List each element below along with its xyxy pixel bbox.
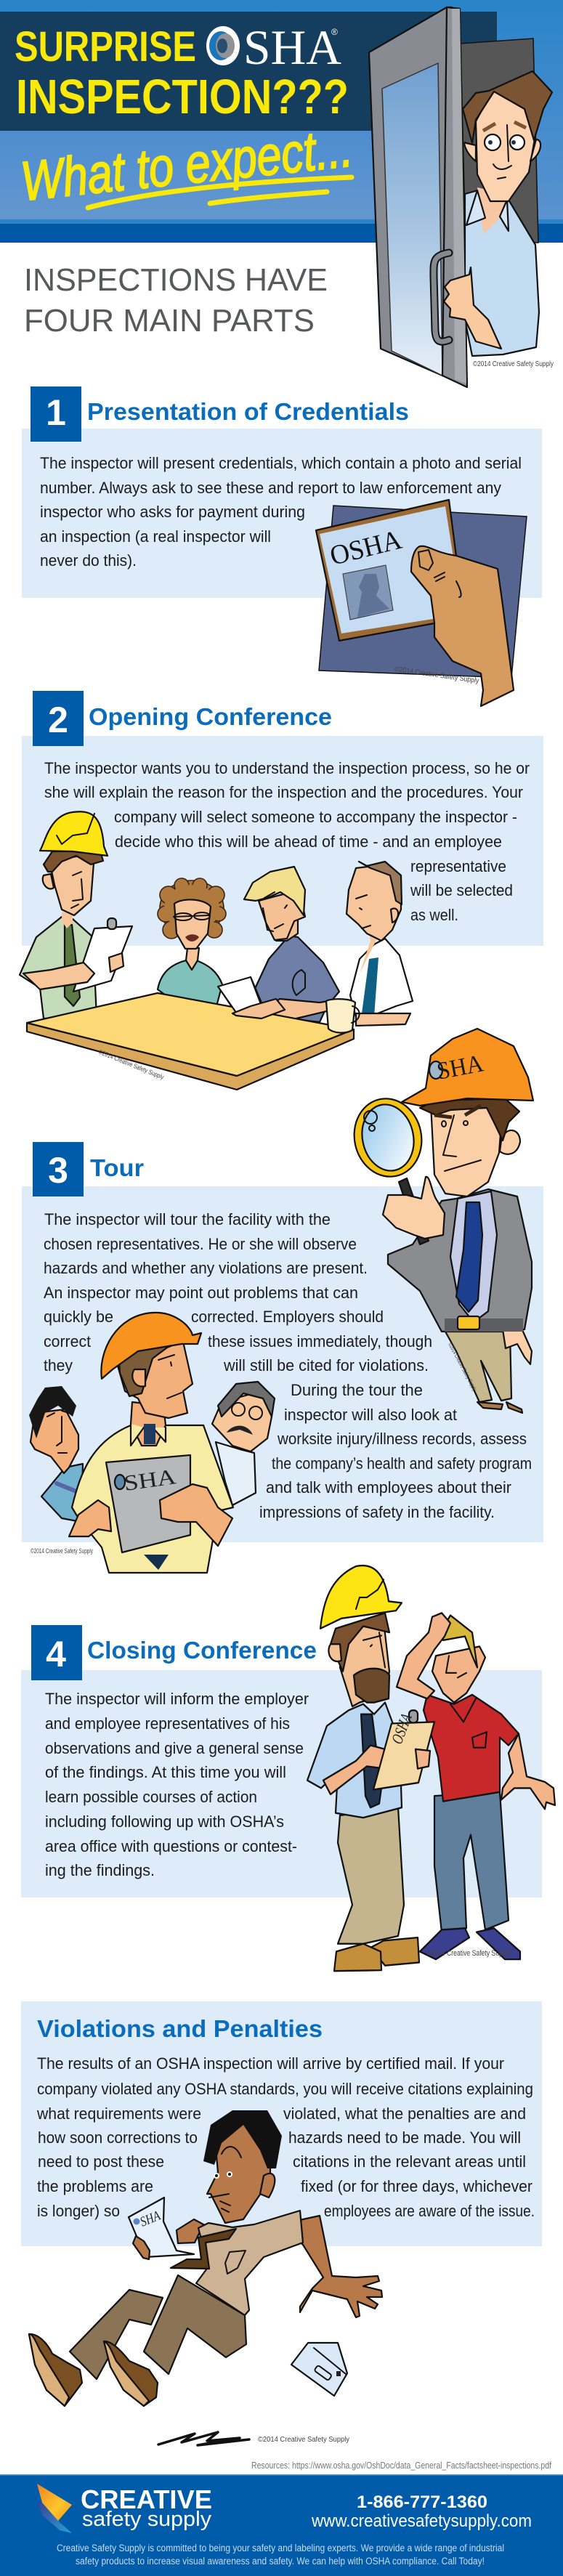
body text: The results of an OSHA inspection will arrive by certified mail. If your — [37, 2054, 504, 2073]
contact details: 1-866-777-1360 — [357, 2492, 487, 2512]
number badge 4: 4 — [46, 1634, 66, 1674]
woman with curly hair — [158, 878, 226, 1006]
body text — [36, 2054, 535, 2220]
body text: During the tour the — [291, 1381, 423, 1399]
clipboard — [106, 1455, 190, 1552]
illustration: inspector with magnifier — [347, 1029, 533, 1413]
table — [27, 977, 354, 1090]
illustration: hand with credentials: ©2014 Creative Safety Supply — [394, 665, 479, 685]
body text: she will explain the reason for the inspection and the procedures. Your — [44, 783, 523, 801]
body text: inspector will also look at — [284, 1406, 457, 1424]
body text: The inspector will present credentials, which contain a photo and serial — [40, 454, 522, 472]
body text: never do this). — [40, 551, 137, 570]
door handle — [434, 253, 449, 341]
illustration: man behind door — [369, 7, 554, 387]
logo: OSHA: SHA — [243, 20, 341, 75]
hand on door — [444, 267, 501, 349]
body text: learn possible courses of action — [45, 1788, 257, 1806]
body text: and employee representatives of his — [45, 1714, 290, 1733]
body text: chosen representatives. He or she will observe — [44, 1235, 357, 1253]
envelope — [291, 2343, 347, 2396]
orange OSHA hard hat — [402, 1029, 533, 1106]
number badge 4 — [31, 1625, 82, 1680]
body text: decide who this will be ahead of time - and an employee — [115, 833, 502, 851]
footer — [0, 2474, 563, 2576]
body text: area office with questions or contest- — [45, 1837, 297, 1855]
company blurb — [57, 2543, 504, 2567]
copyright: ©2014 Creative Safety Supply — [97, 1048, 165, 1081]
body text: of the findings. At this time you will — [45, 1763, 286, 1781]
body text: an inspection (a real inspector will — [40, 527, 271, 546]
trousers and shoes — [29, 2275, 246, 2406]
magnifying glass — [347, 1093, 429, 1244]
panel: 2 opening conference — [20, 691, 543, 1090]
body text: company violated any OSHA standards, you will receive citations explaining — [37, 2080, 533, 2098]
body text: company will select someone to accompany the inspector - — [114, 808, 517, 826]
body text: The inspector will inform the employer — [45, 1690, 309, 1708]
man with beard — [307, 1566, 434, 1971]
heading: four main parts — [24, 262, 328, 339]
heading: closing conference: Closing Conference — [87, 1637, 317, 1664]
panel: violations and penalties — [21, 2001, 542, 2406]
body text — [45, 1690, 309, 1879]
body text: quickly be — [44, 1308, 113, 1326]
worker right with glasses — [212, 1382, 275, 1505]
number badge 3: 3 — [48, 1150, 68, 1191]
company blurb: safety products to increase visual awareness and safety. We can help with OSHA compliance. Call Today! — [76, 2556, 485, 2567]
number badge 1 — [31, 386, 81, 442]
logo icon — [37, 2484, 72, 2533]
worker left — [29, 1386, 103, 1522]
body text: corrected. Employers should — [191, 1308, 384, 1326]
body text: fixed (or for three days, whichever — [301, 2177, 532, 2195]
number badge 3 — [33, 1142, 84, 1196]
body text: hazards need to be made. You will — [288, 2129, 521, 2147]
body text — [44, 1210, 532, 1521]
contact details: www.creativesafetysupply.com — [311, 2511, 532, 2531]
body text: and talk with employees about their — [266, 1478, 511, 1496]
heading: opening conference: Opening Conference — [89, 703, 332, 730]
company name: safety supply — [82, 2508, 212, 2531]
body text: representative — [410, 857, 506, 875]
body text: The inspector wants you to understand the inspection process, so he or — [44, 759, 530, 777]
panel: 4 closing conference — [21, 1566, 555, 1971]
number badge 1: 1 — [46, 392, 66, 433]
subtitle: what to expect: What to expect... — [18, 116, 355, 213]
body text: including following up with OSHA’s — [45, 1812, 284, 1831]
copyright: ©2014 Creative Safety Supply — [426, 1950, 511, 1958]
face — [476, 91, 536, 201]
letter — [129, 2198, 194, 2259]
man with beard: OSHA — [388, 1711, 415, 1746]
header banner — [0, 0, 563, 243]
body text: need to post these — [38, 2152, 164, 2171]
company name: CREATIVE — [81, 2484, 212, 2514]
illustration: inspector with magnifier: ©2014 Creative Safety Supply — [447, 1342, 478, 1392]
body text: impressions of safety in the facility. — [259, 1503, 495, 1521]
body text: The inspector will tour the facility with the — [44, 1210, 331, 1228]
body text: number. Always ask to see these and report to law enforcement any — [40, 479, 501, 497]
number badge 2: 2 — [48, 700, 68, 740]
body text: inspector who asks for payment during — [40, 503, 305, 521]
illustration: inspector with clipboard and two workers: ©2014 Creative Safety Supply — [31, 1547, 93, 1555]
coffee mug — [326, 999, 360, 1033]
shirt and arm — [171, 2211, 382, 2317]
body text — [44, 759, 530, 924]
body text: as well. — [410, 906, 458, 924]
title: inspection: INSPECTION??? — [16, 70, 349, 124]
heading: tour: Tour — [90, 1154, 144, 1181]
body text: observations and give a general sense — [45, 1739, 304, 1757]
body text: An inspector may point out problems that can — [44, 1284, 358, 1302]
body text: correct — [44, 1332, 91, 1350]
body text: hazards and whether any violations are present. — [44, 1259, 368, 1277]
head — [203, 2110, 282, 2223]
main figure — [69, 1313, 233, 1573]
company name — [81, 2484, 212, 2531]
body text: worksite injury/illness records, assess — [277, 1430, 527, 1448]
panel: 3 tour — [22, 1029, 543, 1573]
signature and copyright — [158, 2432, 349, 2445]
body text: violated, what the penalties are and — [283, 2105, 526, 2123]
company blurb: Creative Safety Supply is committed to being your safety and labeling experts. We provide a wide range of industrial — [57, 2543, 504, 2553]
signature and copyright: ©2014 Creative Safety Supply — [258, 2436, 349, 2444]
body text: will still be cited for violations. — [223, 1356, 429, 1374]
blond man in blue shirt — [219, 867, 339, 1022]
letter: SHA — [138, 2208, 163, 2230]
man with tie and mug — [347, 862, 413, 1026]
logo: OSHA: ® — [331, 27, 338, 37]
illustration: conference group — [20, 811, 413, 1090]
number badge 2 — [33, 691, 84, 746]
body text: these issues immediately, though — [208, 1332, 432, 1350]
heading: four main parts: FOUR MAIN PARTS — [24, 303, 315, 339]
illustration: inspector with clipboard and two workers — [29, 1313, 275, 1573]
body text: will be selected — [410, 881, 513, 899]
illustration: two men closing conference — [307, 1566, 555, 1971]
person with yellow hard hat — [20, 811, 132, 1018]
body text: the company’s health and safety program — [272, 1454, 532, 1473]
body text: what requirements were — [36, 2105, 201, 2123]
clipboard: SHA — [122, 1465, 178, 1496]
illustration: falling man reading letter — [29, 2110, 382, 2406]
illustration: hand with credentials — [316, 500, 527, 706]
man in red shirt — [397, 1613, 555, 1959]
contact details — [311, 2492, 532, 2531]
body text: citations in the relevant areas until — [293, 2152, 526, 2171]
body text — [40, 454, 522, 570]
body text: is longer) so — [37, 2202, 120, 2220]
door — [369, 7, 452, 376]
body text: the problems are — [37, 2177, 153, 2195]
heading: presentation: Presentation of Credentials — [87, 398, 409, 425]
heading: four main parts: INSPECTIONS HAVE — [24, 262, 328, 298]
orange OSHA hard hat: SHA — [434, 1050, 486, 1085]
panel: 1 presentation of credentials — [22, 386, 542, 706]
title: surprise: SURPRISE — [15, 23, 196, 70]
heading: violations: Violations and Penalties — [37, 2015, 323, 2042]
body text: employees are aware of the issue. — [324, 2202, 535, 2220]
illustration: hand with credentials: OSHA — [327, 524, 405, 572]
body text: they — [44, 1356, 73, 1374]
body text: how soon corrections to — [38, 2129, 198, 2147]
body text: ing the findings. — [45, 1861, 155, 1879]
